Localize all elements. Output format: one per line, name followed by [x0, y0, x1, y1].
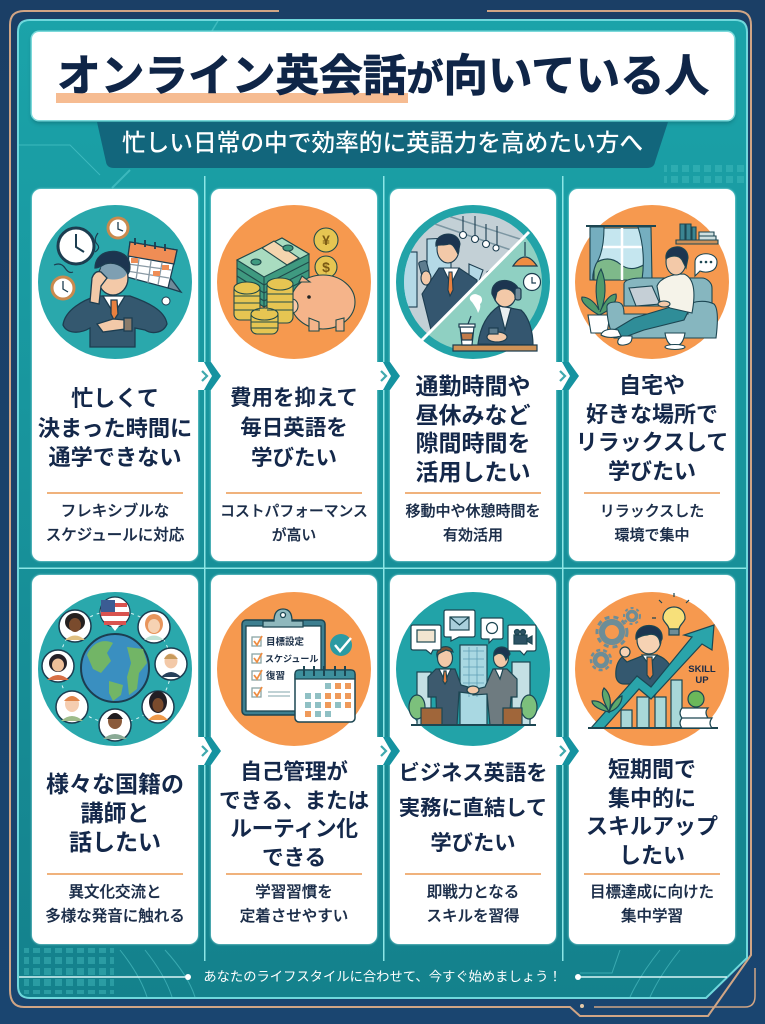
benefit text: 多様な発音に触れる — [45, 908, 185, 924]
divider — [405, 873, 541, 875]
card 6: self-management — [211, 575, 377, 944]
benefit text — [46, 502, 184, 544]
subtitle ribbon — [97, 122, 668, 168]
icon: business handshake — [396, 592, 550, 746]
icon: stressed businessman with clocks — [38, 205, 192, 359]
heading: 通学できない — [48, 445, 182, 470]
icon: checklist and calendar: 復習 — [266, 670, 285, 682]
card 5: international — [32, 575, 198, 944]
heading: ビジネス英語を — [398, 761, 548, 785]
title highlight underline — [56, 93, 408, 103]
card 8: skill up — [569, 575, 735, 944]
heading: 決まった時間に — [38, 416, 192, 440]
heading: 短期間で — [608, 757, 696, 782]
benefit text — [426, 884, 520, 924]
benefit text: フレキシブルな — [61, 503, 169, 520]
heading: 学びたい — [430, 831, 516, 855]
icon: relaxing at home with laptop — [575, 205, 729, 359]
benefit text — [45, 884, 185, 924]
divider — [47, 873, 183, 875]
card 7: business — [390, 575, 556, 944]
divider — [405, 492, 541, 494]
heading — [576, 373, 728, 484]
icon: money and piggy bank — [217, 205, 371, 359]
heading: したい — [619, 842, 685, 868]
card 2: cost — [211, 189, 377, 561]
heading — [46, 771, 184, 855]
icon: checklist and calendar: 目標設定 — [266, 636, 305, 648]
benefit text: コストパフォーマンス — [220, 504, 368, 520]
icon: money and piggy bank: $ — [322, 259, 330, 275]
heading: 講師と — [80, 800, 150, 826]
heading: 好きな場所で — [586, 402, 718, 427]
benefit text: 目標達成に向けた — [590, 884, 714, 901]
benefit text: 集中学習 — [621, 908, 683, 924]
heading: できる、または — [219, 788, 369, 812]
benefit text: スキルを習得 — [426, 908, 520, 924]
card 1: busy — [32, 189, 198, 561]
heading: ルーティン化 — [230, 816, 358, 841]
benefit text — [405, 503, 540, 544]
footer call to action: あなたのライフスタイルに合わせて、今すぐ始めましょう！ — [203, 969, 562, 984]
icon: skill up arrow: SKILL — [688, 664, 716, 675]
heading: 学びたい — [251, 446, 337, 470]
heading: 忙しくて — [71, 386, 159, 411]
heading — [416, 373, 530, 485]
icon: skill up arrow: UP — [695, 675, 709, 686]
heading: 集中的に — [608, 786, 696, 810]
benefit text: が高い — [272, 528, 316, 544]
divider — [584, 873, 720, 875]
heading: リラックスして — [576, 430, 728, 455]
card 3: commute — [390, 189, 556, 561]
subtitle text: 忙しい日常の中で効率的に英語力を高めたい方へ — [122, 131, 643, 157]
heading: スキルアップ — [586, 814, 718, 839]
heading: 活用したい — [416, 459, 530, 485]
benefit text: 有効活用 — [443, 527, 503, 544]
heading: 通勤時間や — [416, 373, 530, 399]
icon: commuter and lunch break — [396, 205, 550, 359]
heading: 自宅や — [619, 373, 685, 398]
heading: 自己管理が — [240, 759, 348, 784]
card 4: home — [569, 189, 735, 561]
divider — [226, 873, 362, 875]
benefit text: リラックスした — [600, 503, 704, 520]
heading — [586, 757, 718, 868]
heading: 様々な国籍の — [46, 771, 184, 797]
heading — [398, 761, 548, 855]
heading: 話したい — [69, 829, 161, 855]
heading — [219, 759, 369, 870]
benefit text: 即戦力となる — [427, 884, 519, 901]
title text: オンライン英会話が向いている人 — [57, 52, 709, 101]
heading: 昼休みなど — [416, 402, 530, 428]
heading — [230, 386, 358, 470]
benefit text: 定着させやすい — [240, 908, 348, 924]
icon: money and piggy bank: ¥ — [322, 232, 330, 248]
heading: 毎日英語を — [240, 416, 348, 440]
benefit text — [220, 504, 368, 544]
divider — [226, 492, 362, 494]
heading: 実務に直結して — [399, 796, 547, 820]
icon: skill up arrow — [575, 592, 729, 746]
heading: できる — [262, 844, 326, 870]
heading — [38, 386, 192, 470]
heading: 隙間時間を — [416, 430, 530, 456]
benefit text: スケジュールに対応 — [46, 527, 184, 544]
heading: 費用を抑えて — [230, 386, 358, 410]
benefit text: 異文化交流と — [68, 884, 162, 901]
icon: checklist and calendar — [217, 592, 371, 746]
icon: checklist and calendar: スケジュール — [265, 654, 318, 664]
divider — [47, 492, 183, 494]
benefit text: 学習習慣を — [255, 884, 333, 901]
benefit text: 移動中や休憩時間を — [405, 503, 540, 520]
title banner — [32, 32, 734, 120]
benefit text: 環境で集中 — [614, 527, 690, 544]
benefit text — [590, 884, 714, 924]
benefit text — [600, 503, 704, 544]
divider — [584, 492, 720, 494]
heading: 学びたい — [608, 459, 696, 484]
icon: globe and people — [38, 592, 192, 746]
benefit text — [240, 884, 348, 924]
